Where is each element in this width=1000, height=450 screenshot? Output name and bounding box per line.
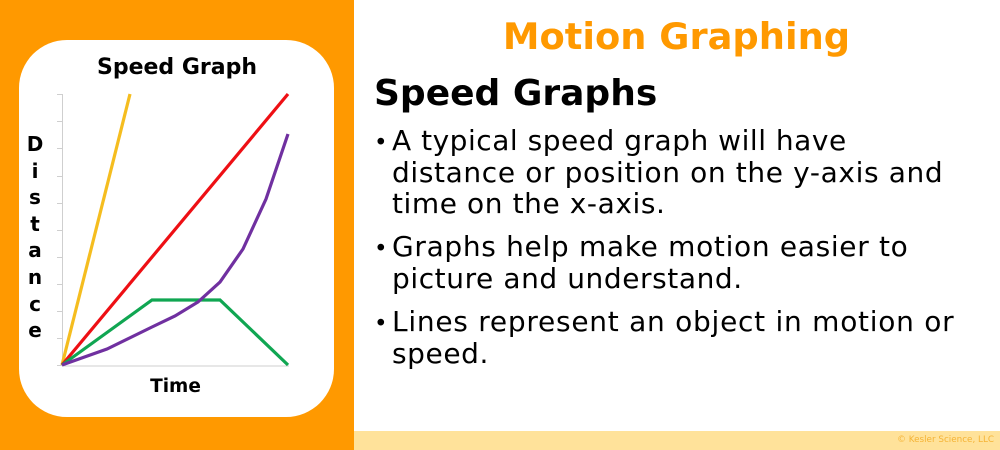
bullet 1: distance or position on the y-axis and xyxy=(392,156,943,189)
x-axis label: Time xyxy=(150,376,201,397)
y-axis label: n xyxy=(28,265,42,289)
y-axis label: t xyxy=(30,212,40,236)
bullet 2 xyxy=(374,230,908,295)
bullet 3: Lines represent an object in motion or xyxy=(392,305,954,338)
y-axis label: D xyxy=(27,132,43,156)
line: green xyxy=(62,300,288,365)
y-axis label xyxy=(27,132,43,342)
graph title: Speed Graph xyxy=(97,55,257,80)
bullet 1: A typical speed graph will have xyxy=(392,124,847,157)
bullet 3 xyxy=(374,305,954,370)
bullet 2: • xyxy=(374,236,388,262)
line: yellow xyxy=(62,94,130,365)
y-axis label: s xyxy=(29,185,41,209)
bullet 1: • xyxy=(374,130,388,156)
line: red xyxy=(62,94,288,365)
axes and ticks xyxy=(57,94,289,366)
y-axis label: a xyxy=(28,238,42,262)
bullet 2: picture and understand. xyxy=(392,262,743,295)
copyright: © Kesler Science, LLC xyxy=(897,435,994,445)
panel: white rounded graph card xyxy=(19,40,334,417)
footer band xyxy=(354,431,1000,450)
line: purple xyxy=(62,134,288,365)
section heading: Speed Graphs xyxy=(374,73,657,114)
y-axis label: i xyxy=(32,159,38,183)
bullet 2: Graphs help make motion easier to xyxy=(392,230,908,263)
bullet 3: speed. xyxy=(392,337,489,370)
main title: Motion Graphing xyxy=(503,15,850,58)
bullet 3: • xyxy=(374,311,388,337)
panel: left orange sidebar xyxy=(0,0,354,450)
y-axis label: c xyxy=(29,292,41,316)
y-axis label: e xyxy=(28,318,42,342)
bullet 1: time on the x-axis. xyxy=(392,187,665,220)
chart: speed graph xyxy=(27,55,290,397)
bullet 1 xyxy=(374,124,943,220)
